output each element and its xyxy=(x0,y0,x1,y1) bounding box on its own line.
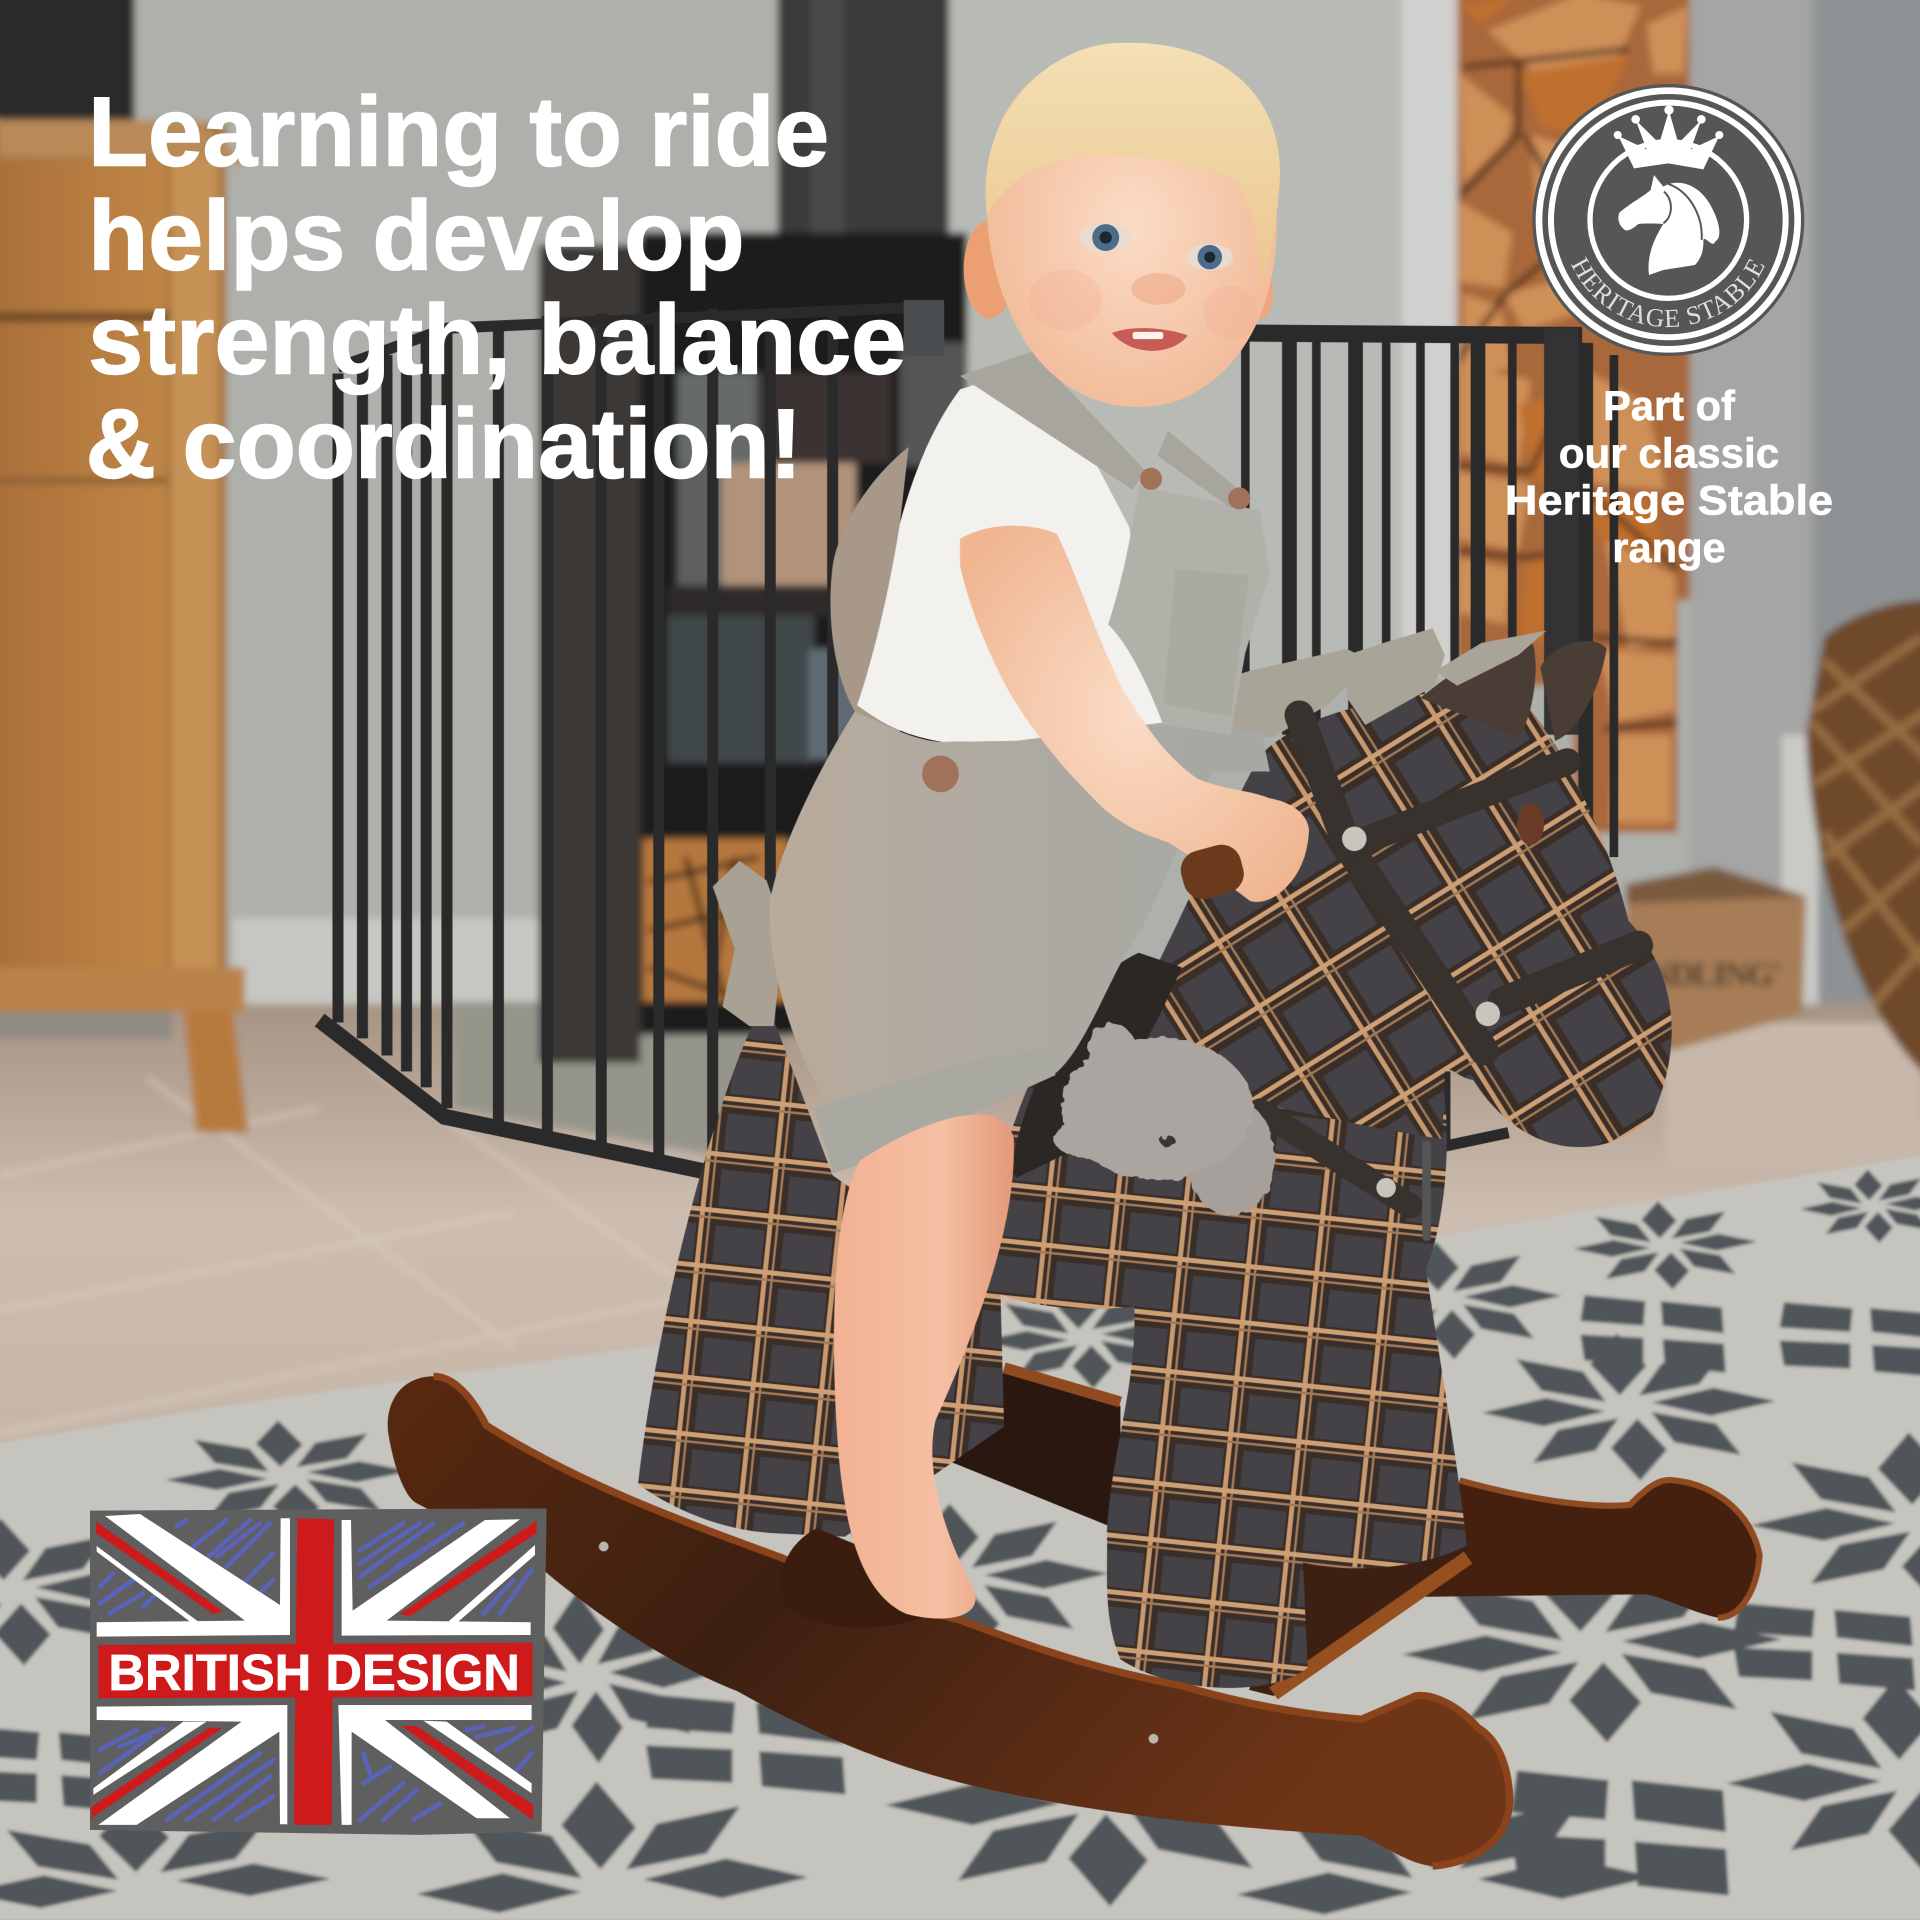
tile hearth xyxy=(453,1002,784,1157)
stove xyxy=(539,245,640,1063)
British Design flag badge xyxy=(90,1508,547,1835)
heading: & coordination! xyxy=(86,389,802,499)
range caption: range xyxy=(1612,524,1726,571)
crate xyxy=(1626,896,1806,1051)
range caption: our classic xyxy=(1559,430,1779,477)
basket xyxy=(1806,600,1920,1078)
heading: helps develop xyxy=(88,180,744,290)
tail bow xyxy=(713,861,784,1026)
horse head silhouette xyxy=(1618,175,1719,275)
overall straps xyxy=(960,351,1247,508)
head xyxy=(964,43,1280,407)
fire guard fence xyxy=(320,306,1614,1173)
leg and foot xyxy=(834,1115,1014,1619)
logs xyxy=(1457,0,1690,600)
baby xyxy=(770,43,1309,1619)
buttons xyxy=(922,468,1250,792)
ears xyxy=(1420,641,1607,741)
range caption: Heritage Stable xyxy=(1505,476,1833,523)
rocker platform xyxy=(951,1371,1120,1531)
flag stripes xyxy=(93,1514,535,1825)
buckles xyxy=(1342,827,1500,1198)
badge text: HERITAGE STABLE xyxy=(1570,256,1765,328)
front rocker xyxy=(388,1376,1510,1866)
back legs xyxy=(638,998,1004,1537)
arm and hand xyxy=(960,526,1309,902)
blue scribbles xyxy=(100,1520,532,1820)
toy bear xyxy=(1054,1024,1275,1216)
rug xyxy=(0,1153,1920,1920)
rocking horse xyxy=(388,628,1760,1866)
bib xyxy=(1108,486,1270,735)
front legs xyxy=(1107,1224,1467,1688)
overalls xyxy=(770,711,1270,1173)
rocker bolts xyxy=(599,1542,1158,1744)
shirt xyxy=(857,367,1163,742)
cabinet xyxy=(0,122,227,980)
rein handle xyxy=(1176,840,1248,903)
cuff xyxy=(814,1051,1056,1173)
heading: strength, balance xyxy=(88,284,906,394)
horse neck and head xyxy=(1102,686,1672,1147)
saddle xyxy=(1010,953,1182,1178)
crown xyxy=(1614,105,1723,169)
mane bows xyxy=(1202,628,1547,737)
heading: Learning to ride xyxy=(88,76,829,186)
bridle straps xyxy=(1260,715,1638,1237)
heading xyxy=(86,76,906,499)
bib pocket xyxy=(1163,569,1249,716)
range caption xyxy=(1505,382,1833,571)
footrest xyxy=(781,1528,933,1627)
flag text: BRITISH DESIGN xyxy=(108,1644,520,1701)
horse eye xyxy=(1517,803,1544,845)
chimney xyxy=(778,0,949,239)
horse body xyxy=(973,965,1447,1311)
back overall flap xyxy=(830,447,909,735)
back rocker xyxy=(1424,1480,1760,1618)
logo: Heritage Stable badge xyxy=(1532,84,1804,356)
range caption: Part of xyxy=(1603,382,1735,429)
floor xyxy=(0,1004,1920,1531)
background: living room scene: NDLING' xyxy=(1647,956,1782,994)
